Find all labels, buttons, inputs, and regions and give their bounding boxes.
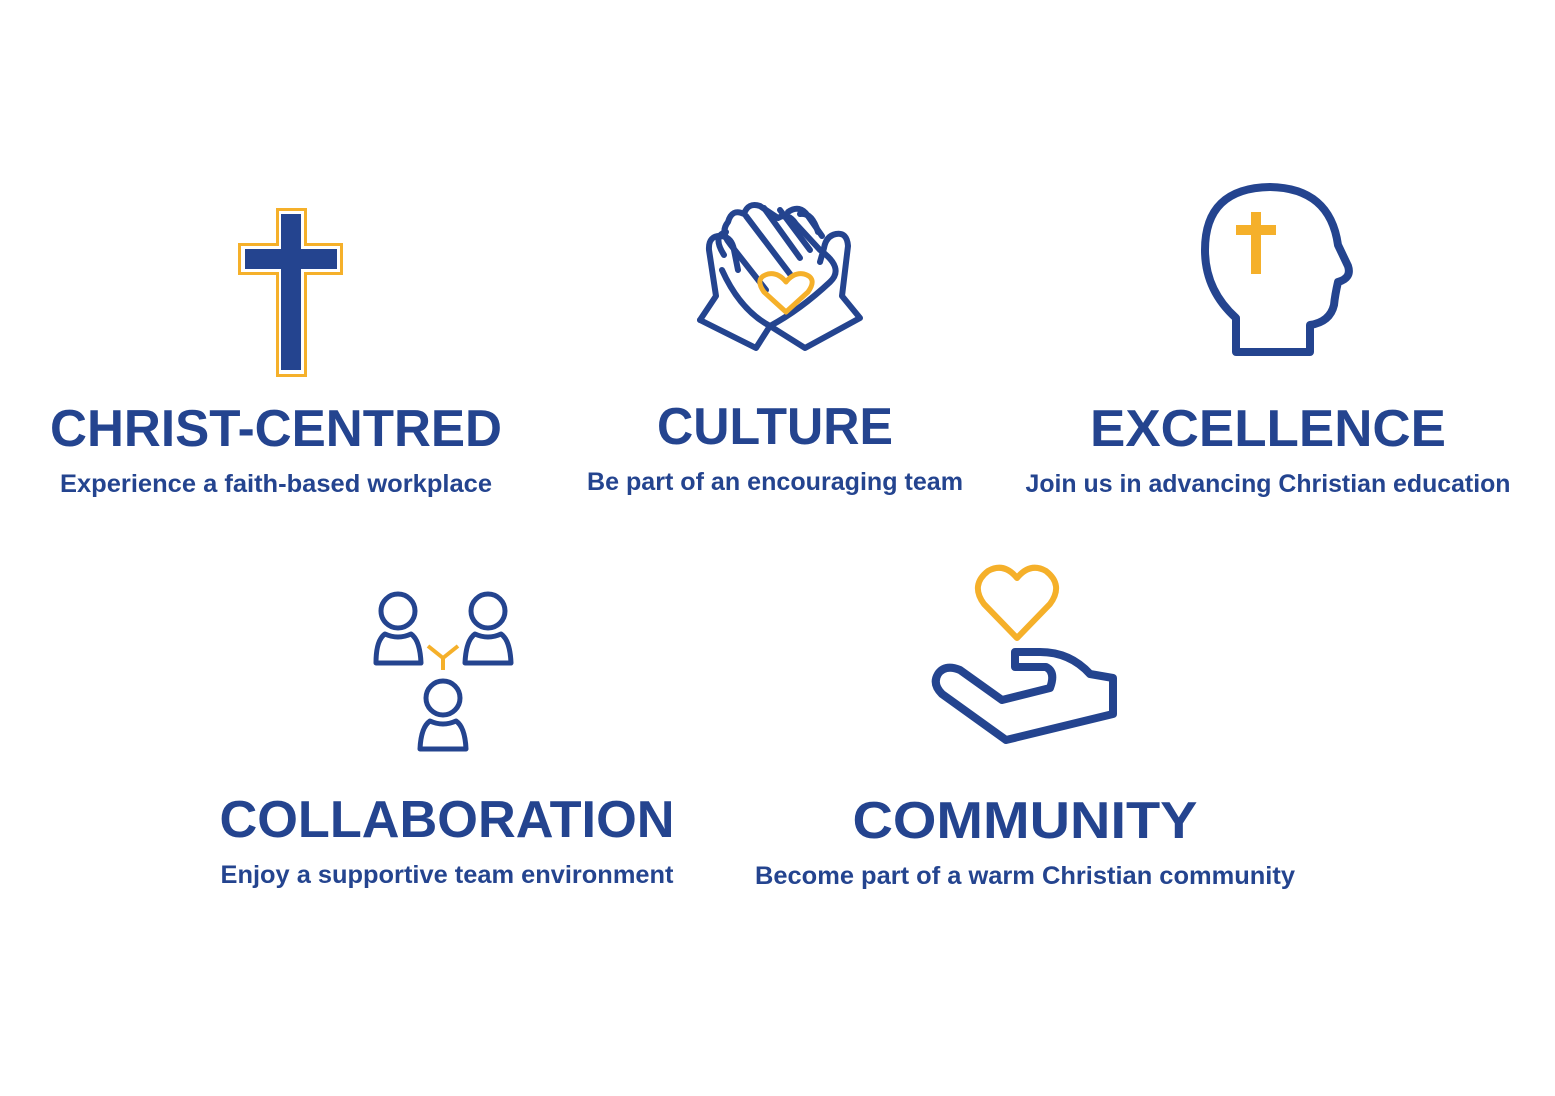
- icon: praying hands with heart: [700, 205, 860, 348]
- icon: three people: [376, 594, 511, 749]
- title: CHRIST-CENTRED: Experience a faith-based workplace: [60, 470, 492, 498]
- title: CHRIST-CENTRED: CHRIST-CENTRED: [50, 400, 502, 458]
- title: COMMUNITY: Become part of a warm Christian community: [755, 862, 1295, 890]
- title: CULTURE: CULTURE: [657, 398, 893, 456]
- title: COMMUNITY: [755, 792, 1295, 890]
- title: CULTURE: [587, 398, 963, 496]
- title: EXCELLENCE: EXCELLENCE: [1090, 400, 1446, 458]
- icon: cross: [238, 208, 343, 377]
- title: COLLABORATION: [220, 791, 674, 889]
- title: COLLABORATION: COLLABORATION: [220, 791, 674, 849]
- title: COLLABORATION: Enjoy a supportive team environment: [220, 861, 674, 889]
- title: CULTURE: Be part of an encouraging team: [587, 468, 963, 496]
- icon: hand with heart: [936, 568, 1113, 740]
- title: EXCELLENCE: [1026, 400, 1510, 498]
- title: COMMUNITY: COMMUNITY: [852, 792, 1198, 850]
- title: EXCELLENCE: Join us in advancing Christian education: [1026, 470, 1510, 498]
- title: CHRIST-CENTRED: [50, 400, 502, 498]
- icon: head with cross: [1205, 187, 1349, 352]
